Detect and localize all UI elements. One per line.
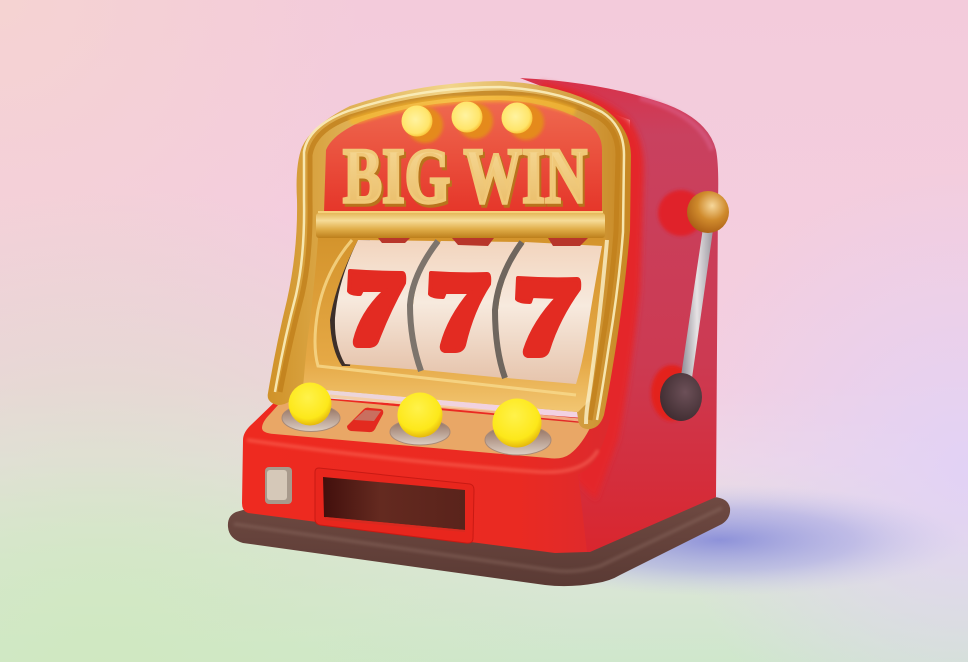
gold frame right pillar highlight xyxy=(586,240,607,424)
seven 1 xyxy=(349,271,404,346)
button 3 xyxy=(485,398,551,455)
button 1 xyxy=(282,382,340,432)
dark pivot knob xyxy=(660,373,702,421)
reels shadow edge xyxy=(330,240,370,366)
big win text: BIG WIN xyxy=(343,132,587,219)
machine body side xyxy=(520,78,718,552)
reel 1 xyxy=(335,240,438,370)
upper socket xyxy=(658,190,704,236)
coin button xyxy=(265,467,292,504)
coin tray slot xyxy=(315,468,474,543)
cast shadow xyxy=(475,484,965,596)
reel 3 xyxy=(498,242,602,384)
lights glow xyxy=(350,98,575,122)
seven 3 xyxy=(517,278,579,356)
gold frame xyxy=(268,81,631,429)
big win sign xyxy=(324,98,602,222)
buttons xyxy=(282,382,551,455)
reel 2 xyxy=(413,241,522,378)
lever rod xyxy=(681,228,713,378)
big win text shadow: BIG WIN xyxy=(345,135,589,222)
partial numbers on top xyxy=(378,238,588,246)
lever xyxy=(651,190,729,421)
reel window xyxy=(303,238,606,412)
sign panel xyxy=(324,100,602,214)
seven 2 xyxy=(430,273,489,351)
light bulbs xyxy=(402,102,544,143)
button 2 xyxy=(390,392,450,445)
gold ball xyxy=(687,191,729,233)
small red button xyxy=(347,408,383,432)
machine body front xyxy=(242,395,610,553)
control tray xyxy=(262,396,592,458)
base plinth xyxy=(228,497,730,586)
lower socket xyxy=(651,365,693,421)
reel dividers xyxy=(410,241,438,371)
gold crossbar xyxy=(316,212,605,238)
